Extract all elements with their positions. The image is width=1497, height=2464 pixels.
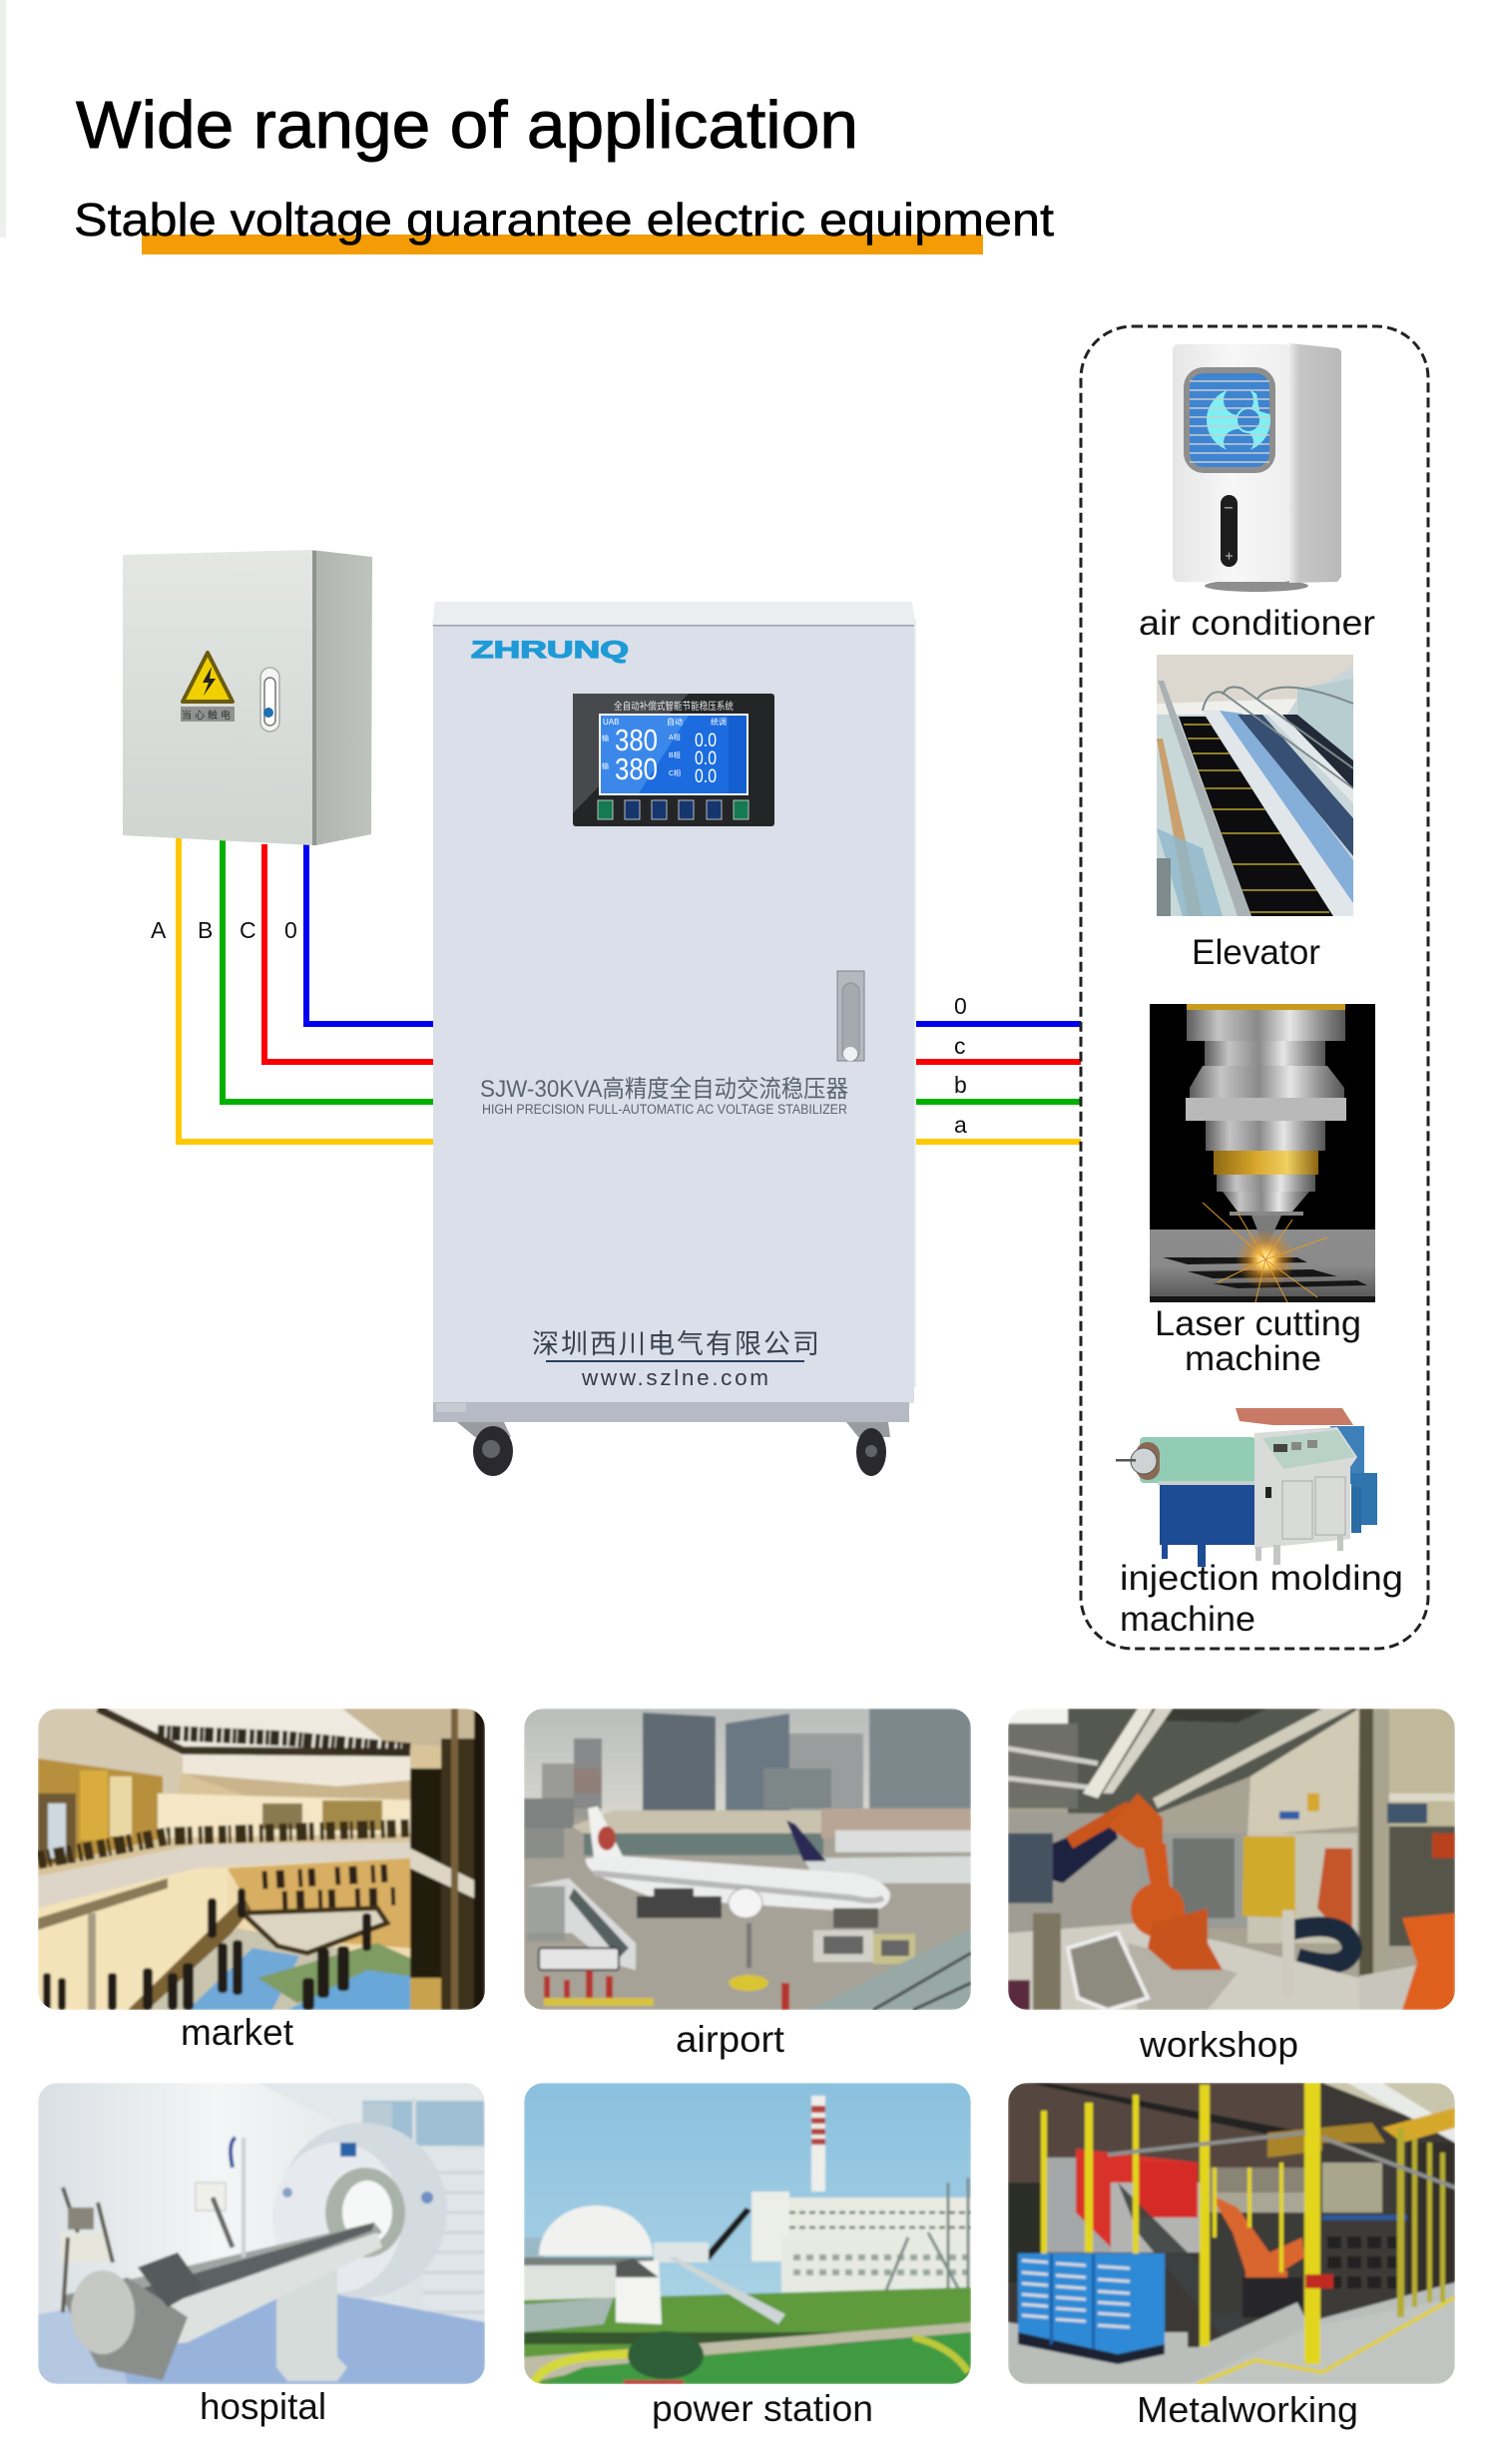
laser cutting machine label — [1155, 1304, 1361, 1378]
output wire labels: b — [954, 1072, 967, 1098]
injection molding machine label: injection molding — [1120, 1559, 1403, 1598]
subtitle: Stable voltage guarantee electric equipment — [74, 194, 1054, 246]
LCD screen: B相 — [669, 750, 681, 759]
LCD screen: 统调 — [711, 717, 727, 727]
air conditioner image — [1173, 343, 1341, 592]
photo: metalworking — [1008, 2083, 1455, 2384]
LCD screen: 0.0 — [695, 766, 717, 787]
title: Wide range of application — [76, 88, 858, 163]
input wire labels: 0 — [284, 917, 297, 943]
output wire labels: a — [954, 1112, 967, 1138]
panel: connected equipment — [1081, 326, 1428, 1649]
LCD screen: 输 — [602, 734, 609, 742]
LCD screen: C相 — [669, 768, 681, 777]
power station label: power station — [652, 2388, 873, 2429]
warning triangle sign — [181, 653, 235, 722]
website: www.szlne.com — [581, 1365, 768, 1390]
door handle — [837, 971, 864, 1061]
injection molding machine image — [1116, 1408, 1377, 1567]
injection molding machine label — [1120, 1559, 1403, 1639]
photo: airport — [524, 1709, 971, 2010]
output wire labels — [954, 993, 967, 1138]
elevator label: Elevator — [1192, 933, 1320, 972]
input wire labels: C — [240, 917, 256, 943]
LCD screen — [599, 714, 748, 795]
subtitle highlight bar — [142, 235, 983, 254]
hospital label: hospital — [200, 2386, 326, 2427]
workshop label: workshop — [1139, 2024, 1298, 2065]
input wire labels: B — [198, 917, 213, 943]
output wire labels: 0 — [954, 993, 967, 1019]
photo: workshop — [1008, 1709, 1455, 2010]
caster wheels — [457, 1422, 890, 1476]
door lock — [260, 668, 279, 732]
control panel — [573, 694, 774, 826]
elevator image — [1157, 655, 1353, 916]
airport label: airport — [676, 2019, 785, 2060]
voltage stabilizer cabinet — [432, 602, 916, 1476]
laser cutting machine image — [1150, 1004, 1375, 1302]
LCD screen: UAB — [603, 718, 619, 727]
distribution box — [123, 550, 372, 845]
model name: SJW-30KVA高精度全自动交流稳压器 — [480, 1076, 848, 1103]
photo: hospital — [38, 2083, 485, 2384]
input wire labels: A — [151, 917, 167, 943]
panel buttons — [598, 800, 748, 819]
LCD screen: 380 — [615, 751, 658, 786]
LCD screen: A相 — [669, 733, 681, 741]
LCD screen: 0.0 — [695, 731, 717, 751]
LCD screen: 0.0 — [695, 748, 717, 769]
laser cutting machine label: machine — [1185, 1339, 1321, 1378]
laser cutting machine label: Laser cutting — [1155, 1304, 1361, 1343]
air conditioner label: air conditioner — [1139, 604, 1375, 643]
injection molding machine label: machine — [1120, 1600, 1255, 1639]
LCD screen: 输 — [602, 761, 609, 770]
LCD screen: 自动 — [667, 717, 683, 727]
model subtitle: HIGH PRECISION FULL-AUTOMATIC AC VOLTAGE STABILIZER — [482, 1102, 847, 1117]
photo: market — [38, 1709, 485, 2010]
warning triangle sign: 当心触电 — [182, 709, 234, 722]
photo: power station — [524, 2083, 971, 2384]
input wires A B C 0 — [179, 836, 435, 1142]
brand logo: ZHRUNQ — [471, 637, 629, 664]
input wire labels — [151, 917, 297, 943]
control panel: 全自动补偿式智能节能稳压系统 — [614, 700, 734, 713]
metalworking label: Metalworking — [1137, 2389, 1358, 2430]
output wire labels: c — [954, 1033, 966, 1059]
output wires 0 c b a — [913, 1024, 1081, 1142]
market label: market — [181, 2012, 294, 2053]
LCD screen: 380 — [615, 723, 658, 757]
company name: 深圳西川电气有限公司 — [532, 1329, 819, 1359]
